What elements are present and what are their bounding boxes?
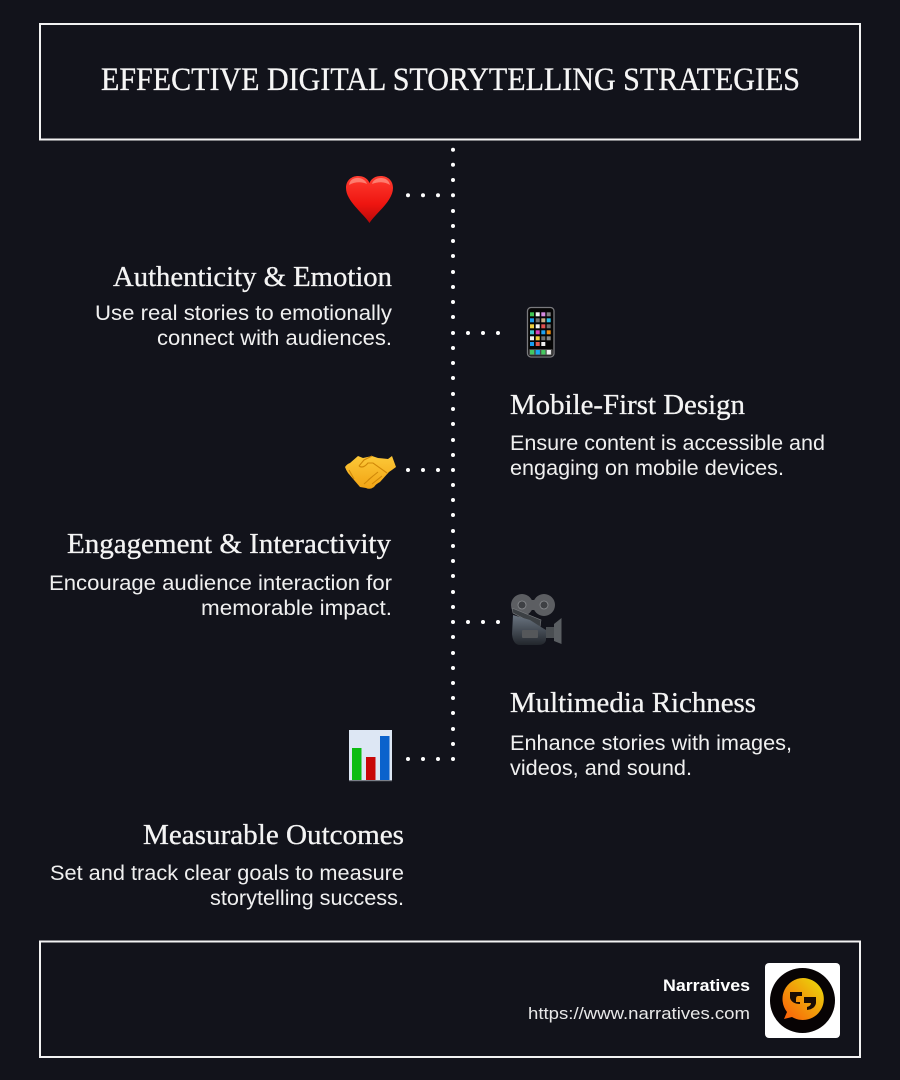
title: EFFECTIVE DIGITAL STORYTELLING STRATEGIES (101, 62, 800, 98)
description: videos, and sound. (510, 756, 692, 780)
step: measurable outcomes (50, 820, 404, 910)
brand name: Narratives (663, 977, 750, 995)
dotted timeline (451, 148, 455, 761)
description (49, 571, 392, 620)
logo (765, 963, 840, 1038)
footer box (40, 942, 860, 1057)
description (510, 431, 825, 480)
description: connect with audiences. (157, 326, 392, 350)
connector: phone (466, 331, 500, 335)
description: Encourage audience interaction for (49, 571, 392, 595)
heading: Authenticity & Emotion (113, 262, 392, 293)
heading: Measurable Outcomes (143, 820, 404, 851)
description: Set and track clear goals to measure (50, 861, 404, 885)
connector: heart (406, 193, 440, 197)
heading: Multimedia Richness (510, 688, 756, 719)
description (50, 861, 404, 910)
description: Ensure content is accessible and (510, 431, 825, 455)
description (95, 301, 392, 350)
step: multimedia richness (510, 688, 792, 780)
step: mobile-first design (510, 390, 825, 480)
icon: mobile phone (528, 308, 554, 357)
icon: bar chart (349, 730, 392, 781)
icon: movie camera (511, 594, 562, 645)
title box (40, 24, 860, 140)
heading: Mobile-First Design (510, 390, 745, 421)
heading: Engagement & Interactivity (67, 529, 391, 560)
icon: heart (346, 176, 393, 223)
description (510, 731, 792, 780)
connector: handshake (406, 468, 440, 472)
brand url: https://www.narratives.com (528, 1004, 750, 1023)
description: Use real stories to emotionally (95, 301, 392, 325)
step: engagement & interactivity (49, 529, 392, 620)
description: Enhance stories with images, (510, 731, 792, 755)
step: authenticity & emotion (95, 262, 392, 350)
connector: camera (466, 620, 500, 624)
connector: chart (406, 757, 440, 761)
icon: handshake (345, 456, 396, 489)
description: engaging on mobile devices. (510, 456, 784, 480)
description: memorable impact. (201, 596, 392, 620)
description: storytelling success. (210, 886, 404, 910)
